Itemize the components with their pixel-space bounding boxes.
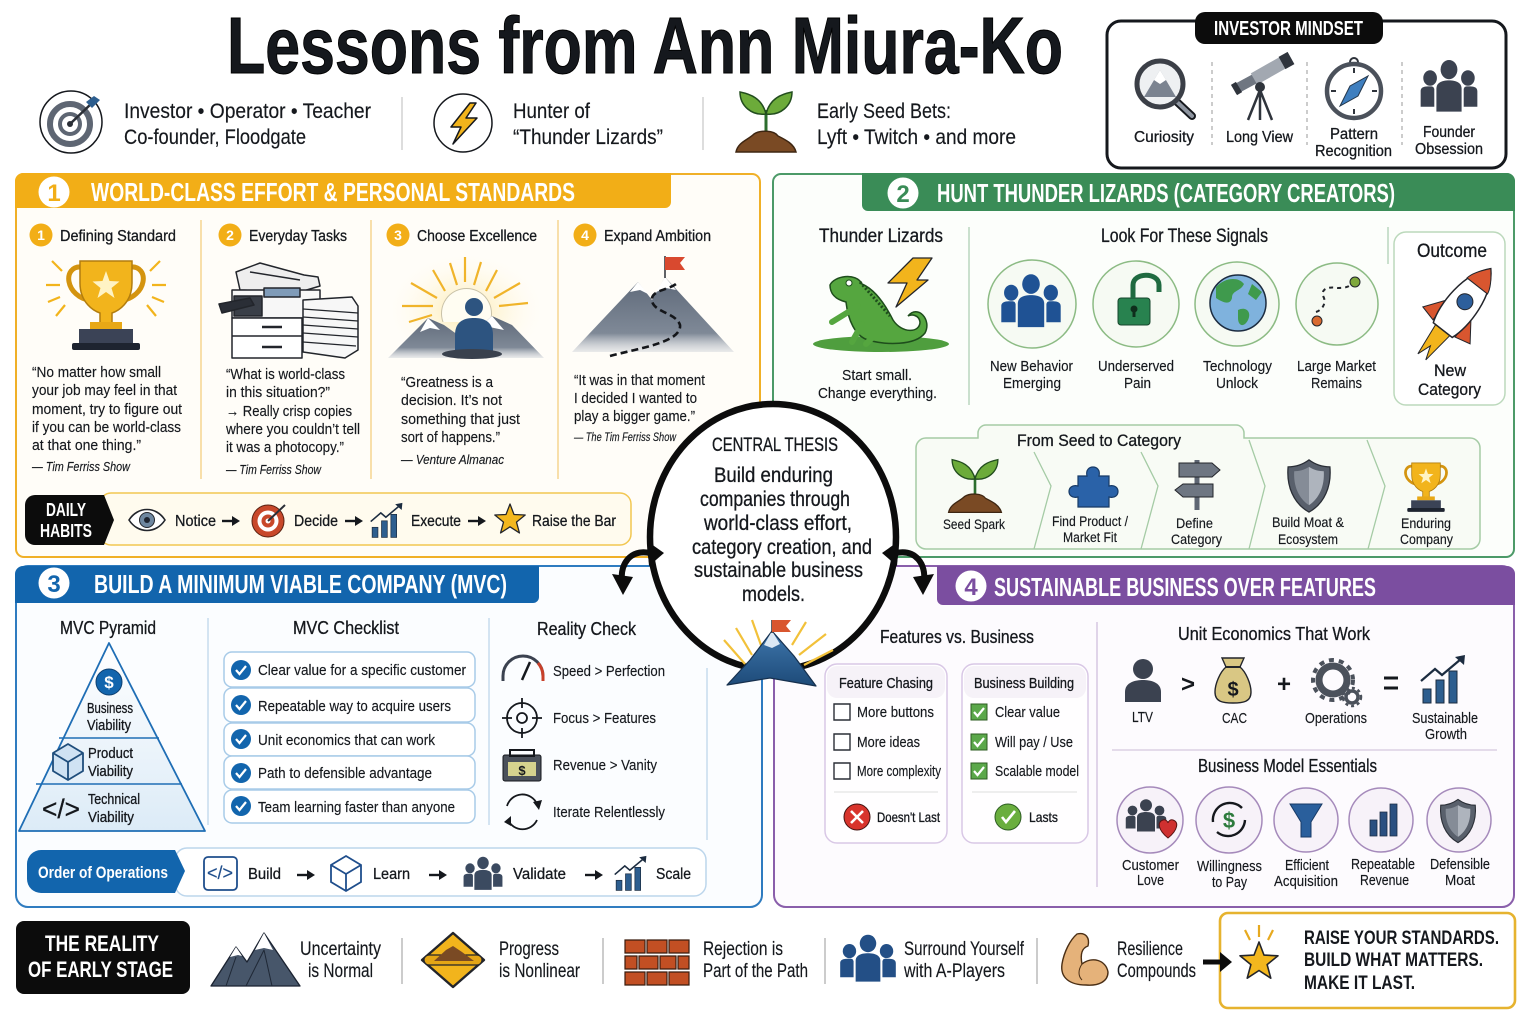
item 5: Team learning faster than anyone — [258, 799, 455, 816]
item: ltv: LTV — [1132, 709, 1153, 726]
heading: panel 1: 1 — [47, 180, 61, 207]
heading: panel 3: BUILD A MINIMUM VIABLE COMPANY (MVC) — [94, 569, 507, 599]
thesis text: sustainable business — [694, 559, 863, 582]
row: focus — [502, 698, 656, 738]
row: focus: Focus > Features — [553, 710, 656, 727]
label: founder obsession: Founder — [1423, 124, 1476, 141]
card: business building: Lasts — [1029, 809, 1058, 825]
column: everyday tasks — [218, 224, 360, 477]
item: growth: Sustainable — [1412, 710, 1478, 727]
column: choose excellence — [386, 224, 546, 467]
block: unit economics — [1125, 624, 1478, 743]
step: validate — [464, 857, 566, 890]
column: choose excellence: Choose Excellence — [417, 228, 537, 245]
item: a-players — [840, 935, 1025, 982]
item: rejection: Part of the Path — [703, 961, 808, 982]
column: expand ambition: 4 — [581, 227, 589, 243]
step: product market fit — [1052, 467, 1128, 545]
label: order of operations — [27, 850, 185, 893]
block: features vs business: Features vs. Business — [880, 627, 1034, 647]
column: defining standard — [30, 224, 183, 474]
heading: panel 2 — [862, 173, 1515, 211]
label: daily habits: DAILY — [46, 500, 86, 520]
step: define category: Category — [1171, 531, 1222, 547]
item: uncertainty — [211, 933, 381, 986]
thesis text: world-class effort, — [703, 512, 852, 535]
operator: equals — [1384, 678, 1398, 688]
quote 3: sort of happens.” — [401, 429, 500, 446]
step: execute: Execute — [411, 513, 461, 530]
step: build: </> — [207, 863, 233, 883]
item 2: Repeatable way to acquire users — [258, 698, 451, 715]
icon: rocket — [1398, 250, 1514, 375]
quote 2 — [225, 366, 360, 477]
pyramid chart: Viability — [88, 764, 134, 780]
quote 4: “It was in that moment — [574, 372, 706, 389]
step: product market fit: Market Fit — [1063, 530, 1117, 545]
pyramid chart: Business — [87, 701, 133, 717]
step: scale: Scale — [656, 866, 691, 883]
thesis text — [692, 435, 872, 606]
item: rejection — [625, 939, 808, 985]
item: operations: Operations — [1305, 710, 1367, 727]
header strip: identity facts — [40, 91, 1016, 153]
step: notice — [129, 510, 216, 530]
column: everyday tasks: Everyday Tasks — [249, 228, 347, 245]
bar: daily habits — [25, 493, 631, 545]
item 4: Path to defensible advantage — [258, 765, 432, 782]
item: defensible moat — [1427, 788, 1491, 889]
quote 1 — [31, 364, 183, 474]
signal: technology unlock: Unlock — [1216, 375, 1258, 392]
column: defining standard: Defining Standard — [60, 228, 176, 245]
step: build moat: Build Moat & — [1272, 514, 1345, 530]
heading: panel 4 — [937, 566, 1515, 605]
step: notice: Notice — [175, 513, 216, 530]
item 5 — [224, 790, 475, 823]
item: cac: $ — [1227, 679, 1239, 701]
item: growth: Growth — [1425, 726, 1467, 743]
item: uncertainty: is Normal — [308, 961, 373, 982]
block: thunder lizards: Start small. — [842, 367, 912, 384]
text: early seed bets: Lyft • Twitch • and more — [817, 126, 1016, 149]
step: enduring company: Enduring — [1401, 515, 1451, 531]
callout text: MAKE IT LAST. — [1304, 973, 1415, 994]
block: mvc checklist: MVC Checklist — [293, 618, 399, 638]
item: customer love: Customer — [1122, 858, 1179, 874]
step: raise the bar: Raise the Bar — [532, 513, 617, 530]
heading: from seed to category: From Seed to Category — [1017, 431, 1181, 450]
quote 1: — Tim Ferriss Show — [31, 459, 131, 474]
item: resilience: Resilience — [1117, 939, 1183, 960]
label: the reality of early stage — [16, 921, 190, 994]
step: enduring company: Company — [1400, 531, 1453, 547]
central thesis — [612, 404, 934, 686]
item 2 — [224, 688, 475, 722]
block: features vs business — [825, 627, 1088, 843]
arrow — [1203, 952, 1232, 972]
label: pattern recognition — [1315, 126, 1392, 160]
callout text — [1304, 928, 1499, 994]
icon: compass — [1327, 58, 1381, 118]
item: willingness to pay: Willingness — [1197, 859, 1262, 875]
item: a-players: with A-Players — [903, 961, 1005, 982]
icon: target — [40, 91, 102, 153]
heading: panel 4: 4 — [964, 574, 978, 601]
item: operations — [1305, 660, 1367, 727]
block: reality check — [502, 619, 665, 829]
panel: investor mindset — [1107, 12, 1506, 168]
signal: new behavior — [988, 260, 1076, 392]
card: feature chasing: More complexity — [857, 764, 942, 780]
thesis text: CENTRAL THESIS — [712, 435, 838, 456]
item: rejection: Rejection is — [703, 939, 783, 960]
thesis text: category creation, and — [692, 536, 872, 559]
step: seed spark: Seed Spark — [943, 516, 1006, 532]
signal: underserved pain — [1093, 261, 1179, 392]
icon: star — [1240, 925, 1278, 978]
panel 3: minimum viable company — [15, 566, 762, 907]
card: feature chasing: More ideas — [857, 735, 920, 751]
card: feature chasing: Feature Chasing — [839, 675, 933, 692]
text: early seed bets: Early Seed Bets: — [817, 100, 951, 123]
item: efficient acquisition: Efficient — [1285, 858, 1329, 874]
row: iterate: Iterate Relentlessly — [553, 804, 665, 821]
quote 3: decision. It’s not — [401, 392, 503, 409]
row: revenue: Revenue > Vanity — [553, 757, 657, 774]
card: business building: Business Building — [974, 675, 1074, 692]
quote 1: moment, try to figure out — [32, 401, 183, 418]
step: decide: Decide — [294, 513, 338, 530]
signal: technology unlock — [1195, 262, 1279, 392]
arrow — [585, 870, 603, 880]
text: early seed bets — [817, 100, 1016, 149]
heading: investor mindset: INVESTOR MINDSET — [1214, 18, 1363, 40]
arrow — [429, 870, 447, 880]
step: raise the bar — [495, 504, 617, 533]
row: speed — [503, 656, 665, 681]
item: progress — [422, 933, 581, 987]
quote 3: something that just — [401, 411, 521, 428]
item: progress: Progress — [499, 939, 559, 960]
card: feature chasing: More buttons — [857, 705, 934, 721]
item: willingness to pay — [1196, 787, 1262, 891]
icon: photocopier and paper — [219, 263, 358, 358]
step: product market fit: Find Product / — [1052, 514, 1128, 529]
item: uncertainty: Uncertainty — [300, 939, 381, 960]
item 1 — [224, 652, 475, 687]
quote 2: → Really crisp copies — [226, 403, 352, 420]
step: define category: Define — [1176, 515, 1213, 531]
panel 2: hunt thunder lizards — [773, 173, 1515, 557]
label: daily habits — [25, 495, 114, 545]
step: build: Build — [248, 866, 281, 883]
heading: panel 1 — [15, 173, 671, 208]
quote 3: — Venture Almanac — [400, 452, 504, 467]
arrow — [468, 516, 486, 526]
signal: underserved pain: Pain — [1124, 375, 1151, 392]
label: curiosity: Curiosity — [1134, 129, 1194, 146]
icon: person facing sunrise — [386, 252, 546, 368]
block: mvc pyramid — [19, 618, 205, 831]
operator: greater than: > — [1181, 671, 1195, 698]
arrow: left curl — [612, 541, 664, 595]
column: defining standard: 1 — [37, 227, 45, 243]
label: founder obsession — [1415, 124, 1483, 158]
block: mvc checklist — [224, 618, 475, 823]
callout text: BUILD WHAT MATTERS. — [1304, 950, 1483, 971]
item 3: Unit economics that can work — [258, 732, 435, 749]
column: expand ambition: Expand Ambition — [604, 228, 711, 245]
signal: new behavior: Emerging — [1003, 375, 1061, 392]
quote 1: your job may feel in that — [32, 382, 178, 399]
text: roles: Co-founder, Floodgate — [124, 126, 306, 149]
block: mvc pyramid: MVC Pyramid — [60, 618, 156, 638]
card: business building: Clear value — [995, 705, 1060, 721]
signal: new behavior: New Behavior — [990, 358, 1073, 375]
icon: trophy with rays — [46, 261, 166, 350]
icon: sprout — [736, 92, 796, 152]
row: iterate — [504, 794, 665, 829]
pyramid chart: </> — [42, 794, 80, 824]
text: roles — [124, 100, 371, 149]
block: thunder lizards: Change everything. — [818, 385, 937, 402]
card: business building: Scalable model — [995, 764, 1079, 780]
label: the reality of early stage: THE REALITY — [45, 931, 159, 956]
column: expand ambition — [572, 224, 734, 444]
quote 4: I decided I wanted to — [574, 390, 697, 407]
item: progress: is Nonlinear — [499, 961, 581, 982]
step: validate: Validate — [513, 866, 566, 883]
step: learn: Learn — [373, 866, 410, 883]
item: a-players: Surround Yourself — [904, 939, 1025, 960]
label: pattern recognition: Pattern — [1330, 126, 1378, 143]
item: customer love — [1117, 787, 1183, 889]
item: repeatable revenue: Revenue — [1360, 873, 1409, 889]
panel 1: world-class effort — [15, 173, 760, 557]
step: execute — [371, 503, 461, 537]
pyramid chart: Viability — [87, 718, 132, 734]
item 1: Clear value for a specific customer — [258, 662, 466, 679]
step: seed spark — [943, 460, 1006, 532]
heading: panel 4: SUSTAINABLE BUSINESS OVER FEATURES — [994, 572, 1376, 602]
block: thunder lizards — [813, 226, 949, 402]
text: roles: Investor • Operator • Teacher — [124, 100, 371, 123]
column: everyday tasks: 2 — [226, 227, 234, 243]
label: order of operations: Order of Operations — [38, 863, 168, 882]
bar: order of operations — [27, 848, 706, 896]
icon: mountain with flag — [572, 256, 734, 356]
arrow — [297, 870, 315, 880]
signal: large market: Remains — [1311, 375, 1362, 392]
card: outcome — [1394, 232, 1514, 405]
item: repeatable revenue: Repeatable — [1351, 857, 1415, 873]
arrow — [345, 516, 363, 526]
item: cac: CAC — [1222, 710, 1247, 727]
label: pattern recognition: Recognition — [1315, 143, 1392, 160]
heading: panel 1: WORLD-CLASS EFFORT & PERSONAL STANDARDS — [91, 177, 575, 207]
block: signals: Look For These Signals — [1101, 226, 1268, 247]
label: long view: Long View — [1226, 129, 1293, 146]
thesis text: models. — [742, 583, 805, 606]
step: build moat — [1272, 460, 1345, 547]
panel 4: sustainable business — [774, 566, 1515, 907]
row: speed: Speed > Perfection — [553, 663, 665, 680]
quote 4: play a bigger game.” — [574, 408, 695, 425]
heading: panel 3: 3 — [47, 571, 61, 598]
pyramid chart: Technical — [88, 792, 140, 808]
column: choose excellence: 3 — [394, 227, 402, 243]
item: efficient acquisition — [1274, 788, 1338, 890]
text: thunder lizards: “Thunder Lizards” — [513, 126, 663, 149]
thesis text: companies through — [700, 488, 850, 511]
quote 1: “No matter how small — [32, 364, 161, 381]
step: decide — [252, 505, 338, 537]
quote 2: — Tim Ferriss Show — [225, 462, 322, 477]
quote 4 — [573, 372, 706, 444]
block: business model essentials: Business Model Essentials — [1198, 756, 1377, 776]
pyramid chart — [19, 643, 205, 831]
step: build moat: Ecosystem — [1278, 531, 1338, 547]
heading: panel 3 — [15, 566, 539, 603]
card: outcome: Category — [1418, 380, 1481, 399]
block: business model essentials — [1117, 756, 1491, 891]
card: feature chasing: Doesn't Last — [877, 809, 940, 825]
thesis text: Build enduring — [714, 464, 833, 487]
icon: founder people — [1421, 60, 1477, 112]
signal: large market — [1296, 263, 1378, 392]
signal: large market: Large Market — [1297, 358, 1377, 375]
item: growth — [1412, 655, 1478, 743]
item: ltv — [1125, 659, 1161, 726]
row: revenue: $ — [518, 763, 526, 778]
block: signals — [988, 226, 1378, 392]
step: build — [204, 857, 281, 890]
label: daily habits: HABITS — [40, 521, 92, 541]
quote 3: “Greatness is a — [401, 374, 494, 391]
row: revenue — [503, 750, 657, 781]
label: founder obsession: Obsession — [1415, 141, 1483, 158]
label: the reality of early stage: OF EARLY STAGE — [28, 957, 173, 982]
heading: panel 2: 2 — [896, 181, 910, 208]
text: thunder lizards — [513, 100, 663, 149]
item: customer love: Love — [1137, 873, 1164, 889]
item: cac — [1215, 658, 1251, 727]
icon: lightning — [434, 94, 492, 152]
item: willingness to pay: to Pay — [1212, 875, 1248, 891]
quote 3 — [400, 374, 521, 467]
card: business building: Will pay / Use — [995, 735, 1073, 751]
item: defensible moat: Defensible — [1430, 857, 1490, 873]
flow: from seed to category — [916, 425, 1480, 549]
card: outcome: New — [1434, 361, 1467, 380]
callout: raise your standards — [1203, 913, 1515, 1008]
block: thunder lizards: Thunder Lizards — [819, 226, 943, 247]
item: efficient acquisition: Acquisition — [1274, 874, 1338, 890]
step: learn — [331, 856, 410, 891]
step: enduring company — [1400, 463, 1453, 547]
text: thunder lizards: Hunter of — [513, 100, 590, 123]
arrow: right curl — [882, 541, 934, 595]
pyramid chart: Viability — [88, 810, 135, 826]
icon: magnifier — [1137, 61, 1192, 116]
item 3 — [224, 723, 475, 756]
item: defensible moat: Moat — [1445, 873, 1475, 889]
quote 2: where you couldn’t tell — [225, 421, 360, 438]
step: define category — [1171, 460, 1222, 547]
quote 4: — The Tim Ferriss Show — [573, 430, 677, 444]
item: willingness to pay: $ — [1223, 808, 1235, 833]
signal: underserved pain: Underserved — [1098, 358, 1174, 375]
item 4 — [224, 756, 475, 789]
arrow — [222, 516, 240, 526]
quote 2: in this situation?” — [226, 384, 330, 401]
pyramid chart: Product — [88, 746, 133, 762]
icon: summit with flag — [724, 620, 833, 686]
item: repeatable revenue — [1349, 788, 1415, 889]
quote 2: “What is world-class — [226, 366, 345, 383]
icon: lizard and bolt — [813, 258, 949, 352]
bottom strip: reality of early stage — [16, 913, 1515, 1008]
item: resilience: Compounds — [1117, 961, 1196, 982]
quote 1: at that one thing.” — [32, 437, 141, 454]
pyramid chart: $ — [104, 673, 114, 692]
card: outcome: Outcome — [1417, 241, 1487, 262]
quote 2: it was a photocopy.” — [226, 439, 344, 456]
quote 1: if you can be world-class — [32, 419, 181, 436]
card: business building — [962, 664, 1088, 843]
block: unit economics: Unit Economics That Work — [1178, 624, 1371, 644]
operator: plus: + — [1277, 671, 1291, 698]
signal: technology unlock: Technology — [1203, 358, 1272, 375]
icon: telescope — [1234, 58, 1291, 120]
block: reality check: Reality Check — [537, 619, 637, 639]
card: feature chasing — [825, 664, 947, 843]
title: Lessons from Ann Miura-Ko — [227, 1, 1063, 90]
item: resilience — [1062, 934, 1196, 985]
heading: investor mindset — [1195, 12, 1383, 44]
step: scale — [615, 856, 691, 890]
